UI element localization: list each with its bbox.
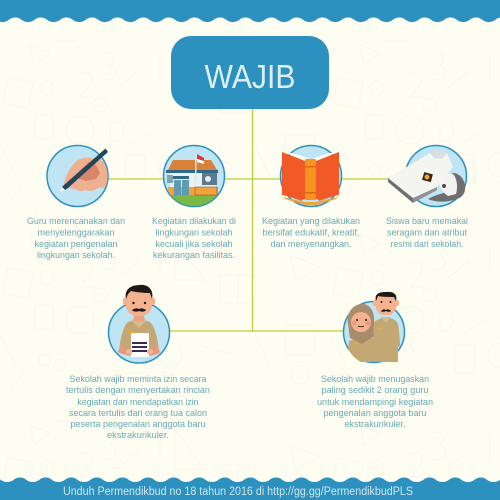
text block: dan menyenangkan. [270,239,352,250]
icon: uniform and cap [388,146,466,206]
text block: resmi dari sekolah. [390,239,464,250]
text block: kekurangan fasilitas. [153,250,235,261]
text block: lingkungan sekolah. [37,250,115,261]
text block: Kegiatan yang dilakukan [262,216,360,227]
title: WAJIB [171,36,329,109]
text block: Siswa baru memakai [386,216,468,227]
text block: seragam dan atribut [387,228,467,238]
icon: school building [162,144,226,208]
text block: bersifat edukatif, kreatif, [262,228,360,238]
icon: orange book [280,146,342,206]
icon: teacher holding letter [108,285,170,363]
text block [262,216,360,250]
panel: izin tertulis [66,285,210,441]
text block: Sekolah wajib meminta izin secara [70,374,207,385]
text block: paling sedikit 2 orang guru [322,385,428,396]
text block: lingkungan sekolah [156,228,232,238]
text block: kegiatan pengenalan [34,239,118,250]
text block [386,216,468,250]
top wave banner [0,0,500,24]
text block: pengenalan anggota baru [324,408,426,419]
text block: kecuali jika sekolah [156,239,232,250]
text block [66,374,210,441]
text block: ekstrakurikuler. [107,430,169,441]
text block: Kegiatan dilakukan di [152,216,236,227]
text block: tertulis dengan menyertakan rincian [66,385,210,396]
text block: ekstrakurikuler. [344,419,406,430]
icon: hand writing [47,146,110,206]
text block: Sekolah wajib menugaskan [321,374,429,385]
title: WAJIB: WAJIB [204,58,296,95]
text block: menyelenggarakan [38,228,114,238]
text block [152,216,236,261]
panel: guru merencanakan [27,146,125,261]
panel: dua guru [317,292,433,430]
text block: secara tertulis dari orang tua calon [69,408,207,419]
text block: untuk mendampingi kegiatan [317,397,433,408]
panel: lingkungan sekolah [152,146,236,261]
icon: two teachers [344,292,404,362]
panel: kegiatan edukatif [262,146,360,250]
bottom wave banner with link: Unduh Permendikbud no 18 tahun 2016 di http://gg.gg/PermendikbudPLS [63,486,413,498]
bottom wave banner with link [0,476,500,500]
text block: kegiatan dan mendapatkan izin [78,397,198,408]
connector lines [100,108,410,331]
text block [27,216,125,261]
text block: peserta pengenalan anggota baru [70,419,206,430]
text block [317,374,433,430]
text block: Guru merencanakan dan [27,216,125,227]
panel: seragam [386,146,468,250]
